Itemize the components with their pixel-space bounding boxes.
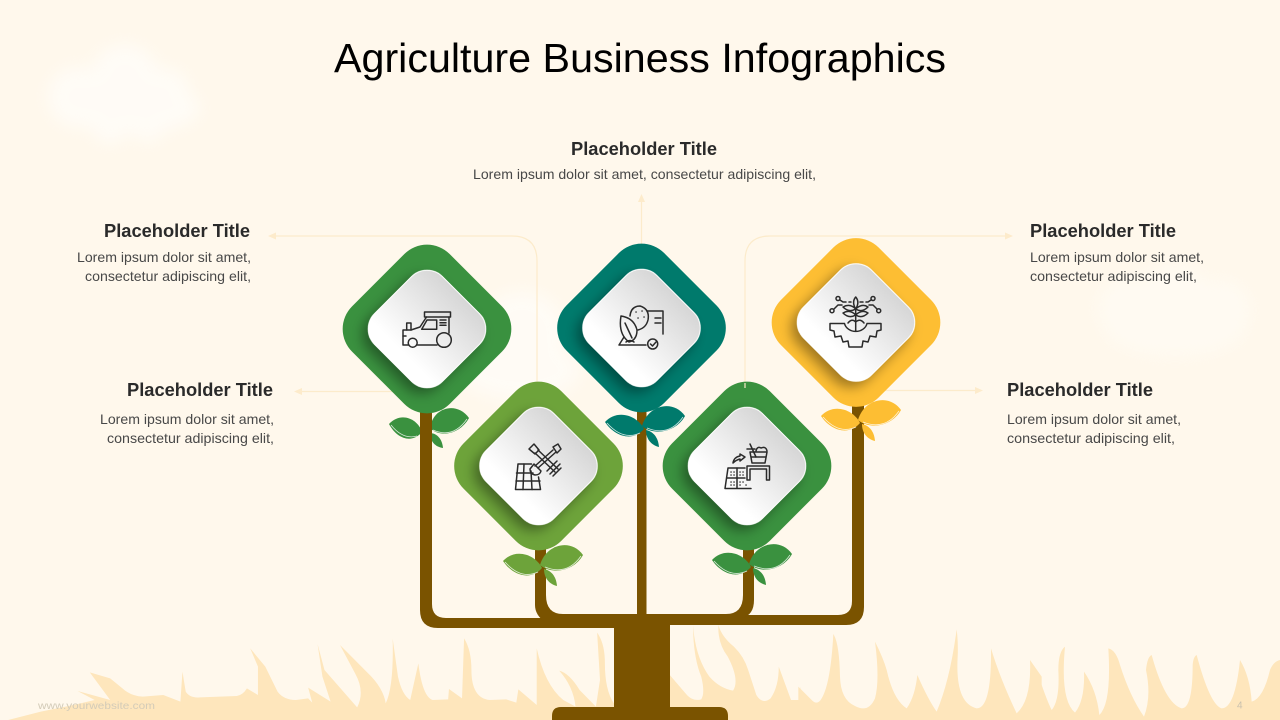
leaves: dark green	[389, 408, 469, 448]
arrow: lower left connector	[294, 388, 400, 395]
text block: upper right: consectetur adipiscing elit,	[1030, 268, 1197, 284]
grass: left	[8, 633, 640, 720]
text block: lower left: consectetur adipiscing elit,	[107, 430, 274, 446]
leaves: teal	[605, 406, 685, 447]
text block: lower left: Lorem ipsum dolor sit amet,	[100, 411, 274, 427]
leaves: green	[712, 544, 792, 585]
icon: plant and gear	[830, 296, 881, 347]
text block: lower left: Placeholder Title	[127, 379, 273, 400]
text block: upper right: Placeholder Title	[1030, 220, 1176, 241]
arrow: upper left connector	[268, 232, 537, 386]
text block: top: Placeholder Title	[571, 138, 717, 159]
text block: upper left: Lorem ipsum dolor sit amet,	[77, 249, 251, 265]
connector tick on green diamond	[744, 383, 746, 388]
cloud: centre	[460, 291, 580, 400]
icon: tractor	[403, 312, 451, 347]
text block: top	[473, 138, 816, 182]
icon: farm tools	[516, 444, 561, 490]
text block: lower left	[100, 379, 274, 446]
diamond: crate and field	[649, 368, 845, 564]
diamond: plant and document	[544, 230, 739, 426]
cloud: right	[1098, 264, 1250, 356]
icon: plant and document	[619, 306, 663, 349]
icon: crate and field	[725, 444, 770, 488]
text block: top: Lorem ipsum dolor sit amet, consectetur adipiscing elit,	[473, 166, 816, 182]
footer: page number: 4	[1237, 700, 1243, 712]
text block: lower right: Lorem ipsum dolor sit amet,	[1007, 411, 1181, 427]
tree: trunk and branches	[420, 400, 864, 720]
text block: upper left	[77, 220, 251, 284]
text block: lower right: consectetur adipiscing elit,	[1007, 430, 1175, 446]
diamond: farm tools	[441, 368, 636, 564]
arrow: lower right connector	[880, 387, 983, 394]
arrow: top connector	[638, 194, 645, 245]
diamond: plant and gear	[758, 225, 954, 420]
text block: upper left: Placeholder Title	[104, 220, 250, 241]
leaves: yellow	[821, 400, 901, 441]
text block: lower right: Placeholder Title	[1007, 379, 1153, 400]
text block: upper left: consectetur adipiscing elit,	[85, 268, 251, 284]
cloud: top left	[48, 44, 200, 144]
footer: website: www.yourwebsite.com	[37, 701, 155, 712]
text block: upper right	[1030, 220, 1204, 284]
leaves: light green	[503, 545, 583, 586]
grass: right	[670, 625, 1280, 720]
text block: upper right: Lorem ipsum dolor sit amet,	[1030, 249, 1204, 265]
diamond: tractor	[329, 231, 525, 427]
title: Agriculture Business Infographics	[334, 35, 946, 81]
arrow: upper right connector	[745, 232, 1013, 386]
text block: lower right	[1007, 379, 1181, 446]
